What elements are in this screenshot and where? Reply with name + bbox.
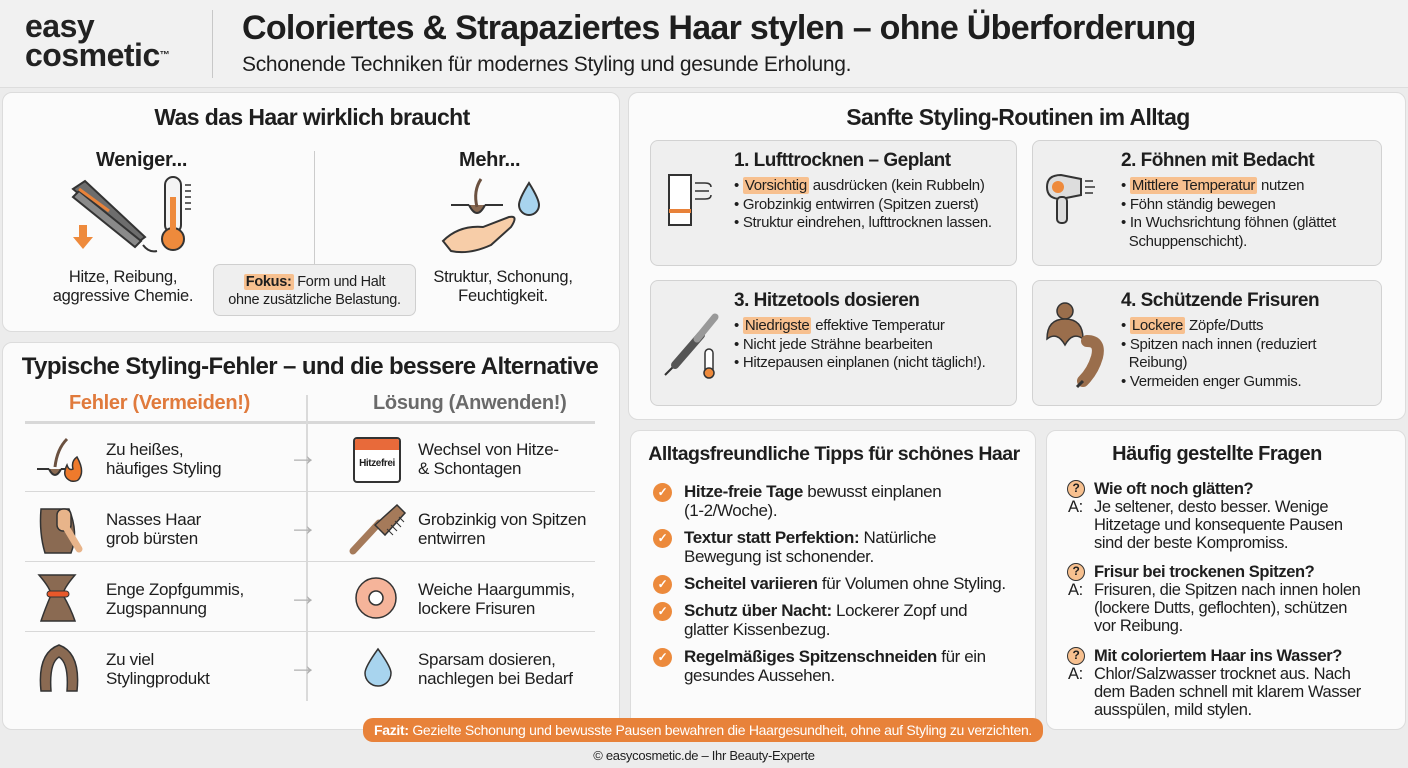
tip 4: glatter Kissenbezug. <box>684 620 830 639</box>
faq 2: Frisur bei trockenen Spitzen? <box>1094 563 1314 581</box>
text <box>106 510 201 548</box>
text: entwirren <box>418 529 485 548</box>
text: & Schontagen <box>418 459 521 478</box>
card 1 <box>650 140 1017 266</box>
tip 3: ✓ <box>658 577 667 591</box>
faq 3: Chlor/Salzwasser trocknet aus. Nach <box>1094 665 1351 683</box>
icon: calendar Hitzefrei <box>353 437 401 483</box>
bullets: • Niedrigste effektive Temperatur <box>734 317 945 334</box>
bullets: • Struktur eindrehen, lufttrocknen lassen. <box>734 214 992 231</box>
heading: Sanfte Styling-Routinen im Alltag <box>846 104 1190 130</box>
faq 1: Hitzetage und konsequente Pausen <box>1094 516 1343 534</box>
row 1 <box>37 437 559 483</box>
text <box>106 440 221 478</box>
text: Sparsam dosieren, <box>418 650 556 669</box>
text: Zu heißes, <box>106 440 183 459</box>
icon: wet hair brush <box>40 508 82 554</box>
bullets: Reibung) <box>1129 354 1187 371</box>
bullets <box>1121 177 1336 250</box>
faq 2: A: <box>1068 581 1083 599</box>
panel: Alltagsfreundliche Tipps <box>630 430 1036 730</box>
heading: Typische Styling-Fehler – und die bessere Alternative <box>22 353 598 380</box>
text: Grobzinkig von Spitzen <box>418 510 586 529</box>
card title: 1. Lufttrocknen – Geplant <box>734 150 951 171</box>
tip 1: Hitze-freie Tage bewusst einplanen <box>684 482 941 501</box>
heading: Häufig gestellte Fragen <box>1112 443 1322 465</box>
text: Wechsel von Hitze- <box>418 440 559 459</box>
row 4 <box>40 644 573 692</box>
faq 2 <box>1067 563 1405 647</box>
panel: Was das Haar wirklich braucht <box>2 92 620 332</box>
bullets: • Vorsichtig ausdrücken (kein Rubbeln) <box>734 177 985 194</box>
arrow: → <box>288 439 318 472</box>
bullets: • Föhn ständig bewegen <box>1121 196 1276 212</box>
panel: Sanfte Styling-Routinen <box>628 92 1406 420</box>
faq 3: Mit coloriertem Haar ins Wasser? <box>1094 647 1342 665</box>
text: Enge Zopfgummis, <box>106 580 244 599</box>
text: häufiges Styling <box>106 459 221 478</box>
card title: 4. Schützende Frisuren <box>1121 290 1319 311</box>
text <box>106 580 244 618</box>
arrow: → <box>288 509 318 542</box>
heading: mehr: Mehr... <box>459 149 520 171</box>
card title: 2. Föhnen mit Bedacht <box>1121 150 1314 171</box>
faq 2: Frisuren, die Spitzen nach innen holen <box>1094 581 1360 599</box>
tip 5: gesundes Aussehen. <box>684 666 835 685</box>
callout: Fokus: ohne zusätzliche Belastung. <box>228 292 401 308</box>
logo: easy <box>25 8 94 44</box>
row 3 <box>38 574 575 622</box>
bullets: • Vermeiden enger Gummis. <box>1121 372 1301 390</box>
tip 1 <box>653 482 941 520</box>
heading: Was das Haar wirklich braucht <box>154 104 470 130</box>
header <box>0 0 1408 88</box>
logo <box>25 8 169 73</box>
text: mehr: Struktur, Schonung, <box>433 268 573 286</box>
bullets <box>1121 317 1316 390</box>
bullets: • Lockere Zöpfe/Dutts <box>1121 317 1263 334</box>
callout: Fazit <box>363 718 1043 742</box>
bullets: • Hitzepausen einplanen (nicht täglich!). <box>734 354 985 371</box>
tip 1: (1-2/Woche). <box>684 501 777 520</box>
faq 1: Wie oft noch glätten? <box>1094 480 1253 498</box>
faq 1: A: <box>1068 498 1083 516</box>
text <box>418 440 559 478</box>
card 4 <box>1032 280 1382 406</box>
text: weniger <box>53 268 193 305</box>
bullets: • Grobzinkig entwirren (Spitzen zuerst) <box>734 196 978 212</box>
tip list <box>653 482 1006 685</box>
text: mehr: Feuchtigkeit. <box>458 287 548 305</box>
card title: 3. Hitzetools dosieren <box>734 290 919 311</box>
icon: calendar Hitzefrei: Hitzefrei <box>359 458 395 469</box>
icon: comb <box>350 504 406 554</box>
faq list <box>1067 480 1361 719</box>
faq 2: ? <box>1073 564 1079 578</box>
title: Coloriertes & Strapaziertes Haar stylen – ohne Überforderung <box>242 9 1196 47</box>
footer: © easycosmetic.de – Ihr Beauty-Experte <box>593 748 815 763</box>
icon: flat iron and thermometer <box>71 176 191 252</box>
text <box>418 510 586 548</box>
logo: cosmetic™ <box>25 37 169 73</box>
faq 3: dem Baden schnell mit klarem Wasser <box>1094 683 1361 701</box>
icon: drop <box>364 648 392 687</box>
icon: towel <box>668 174 712 226</box>
bullets <box>734 317 985 371</box>
text: Zu viel <box>106 650 154 669</box>
tip 5: ✓ <box>658 650 667 664</box>
callout: Fokus: Fokus: Form und Halt <box>246 274 385 290</box>
bullets: • In Wuchsrichtung föhnen (glättet <box>1121 214 1336 231</box>
tip 2: Textur statt Perfektion: Natürliche <box>684 528 936 547</box>
icon: bun and braid <box>1046 302 1104 388</box>
tip 5: Regelmäßiges Spitzenschneiden für ein <box>684 647 986 666</box>
bullets: • Spitzen nach innen (reduziert <box>1121 336 1316 352</box>
panel: Styling-Fehler <box>2 342 620 730</box>
icon: hair <box>40 644 78 692</box>
faq 1: Je seltener, desto besser. Wenige <box>1094 498 1328 516</box>
tip 2: ✓ <box>658 531 667 545</box>
row 2 <box>40 504 586 554</box>
card 2 <box>1032 140 1382 266</box>
card 3 <box>650 280 1017 406</box>
text: mehr <box>433 268 573 305</box>
text: Nasses Haar <box>106 510 201 529</box>
icon: hand, hair and drop <box>442 178 540 254</box>
faq 2: (lockere Dutts, geflochten), schützen <box>1094 599 1347 617</box>
column header: Fehler: Fehler (Vermeiden!) <box>69 392 250 414</box>
tip 5 <box>653 647 986 685</box>
faq 3: ? <box>1073 648 1079 662</box>
heading: Alltagsfreundliche Tipps für schönes Haar <box>648 443 1020 465</box>
bullets: • Nicht jede Strähne bearbeiten <box>734 336 933 352</box>
text: Stylingprodukt <box>106 669 210 688</box>
text <box>106 650 210 688</box>
heading: weniger: Weniger... <box>96 149 187 171</box>
icon: tight ponytail <box>38 574 76 622</box>
callout: Fokus <box>213 264 416 316</box>
subtitle: Schonende Techniken für modernes Styling und gesunde Erholung. <box>242 53 851 76</box>
icon: scrunchie <box>355 577 397 619</box>
arrow: → <box>288 649 318 682</box>
faq 1 <box>1067 480 1343 552</box>
icon: curling iron and thermometer <box>664 314 718 379</box>
text <box>418 650 573 688</box>
faq 3 <box>1067 647 1405 719</box>
panel: FAQ <box>1046 430 1406 730</box>
text: Weiche Haargummis, <box>418 580 575 599</box>
tip 1: ✓ <box>658 485 667 499</box>
tip 2 <box>653 528 936 566</box>
faq 1: ? <box>1073 481 1079 495</box>
text: weniger: Hitze, Reibung, <box>69 268 177 286</box>
callout: Fazit: Fazit: Gezielte Schonung und bewusste Pausen bewahren die Haargesundheit, ohne auf Styling zu verzichten. <box>374 722 1032 738</box>
column header: Lösung: Lösung (Anwenden!) <box>373 392 566 414</box>
faq 2: vor Reibung. <box>1094 617 1183 635</box>
tip 3: Scheitel variieren für Volumen ohne Styling. <box>684 574 1006 593</box>
text <box>418 580 575 618</box>
tip 4: Schutz über Nacht: Lockerer Zopf und <box>684 601 967 620</box>
arrow: → <box>288 579 318 612</box>
icon: hair dryer <box>1046 174 1095 224</box>
bullets <box>734 177 992 231</box>
tip 4 <box>653 601 967 639</box>
text: lockere Frisuren <box>418 599 535 618</box>
tip 2: Bewegung ist schonender. <box>684 547 874 566</box>
icon: hair with flame <box>37 438 82 482</box>
text: Zugspannung <box>106 599 207 618</box>
text: weniger: aggressive Chemie. <box>53 287 193 305</box>
faq 3: ausspülen, mild stylen. <box>1094 701 1252 719</box>
text: grob bürsten <box>106 529 198 548</box>
bullets: • Mittlere Temperatur nutzen <box>1121 177 1304 194</box>
text: nachlegen bei Bedarf <box>418 669 573 688</box>
faq 1: sind der beste Kompromiss. <box>1094 534 1288 552</box>
tip 4: ✓ <box>658 604 667 618</box>
faq 3: A: <box>1068 665 1083 683</box>
bullets: Schuppenschicht). <box>1129 232 1247 250</box>
